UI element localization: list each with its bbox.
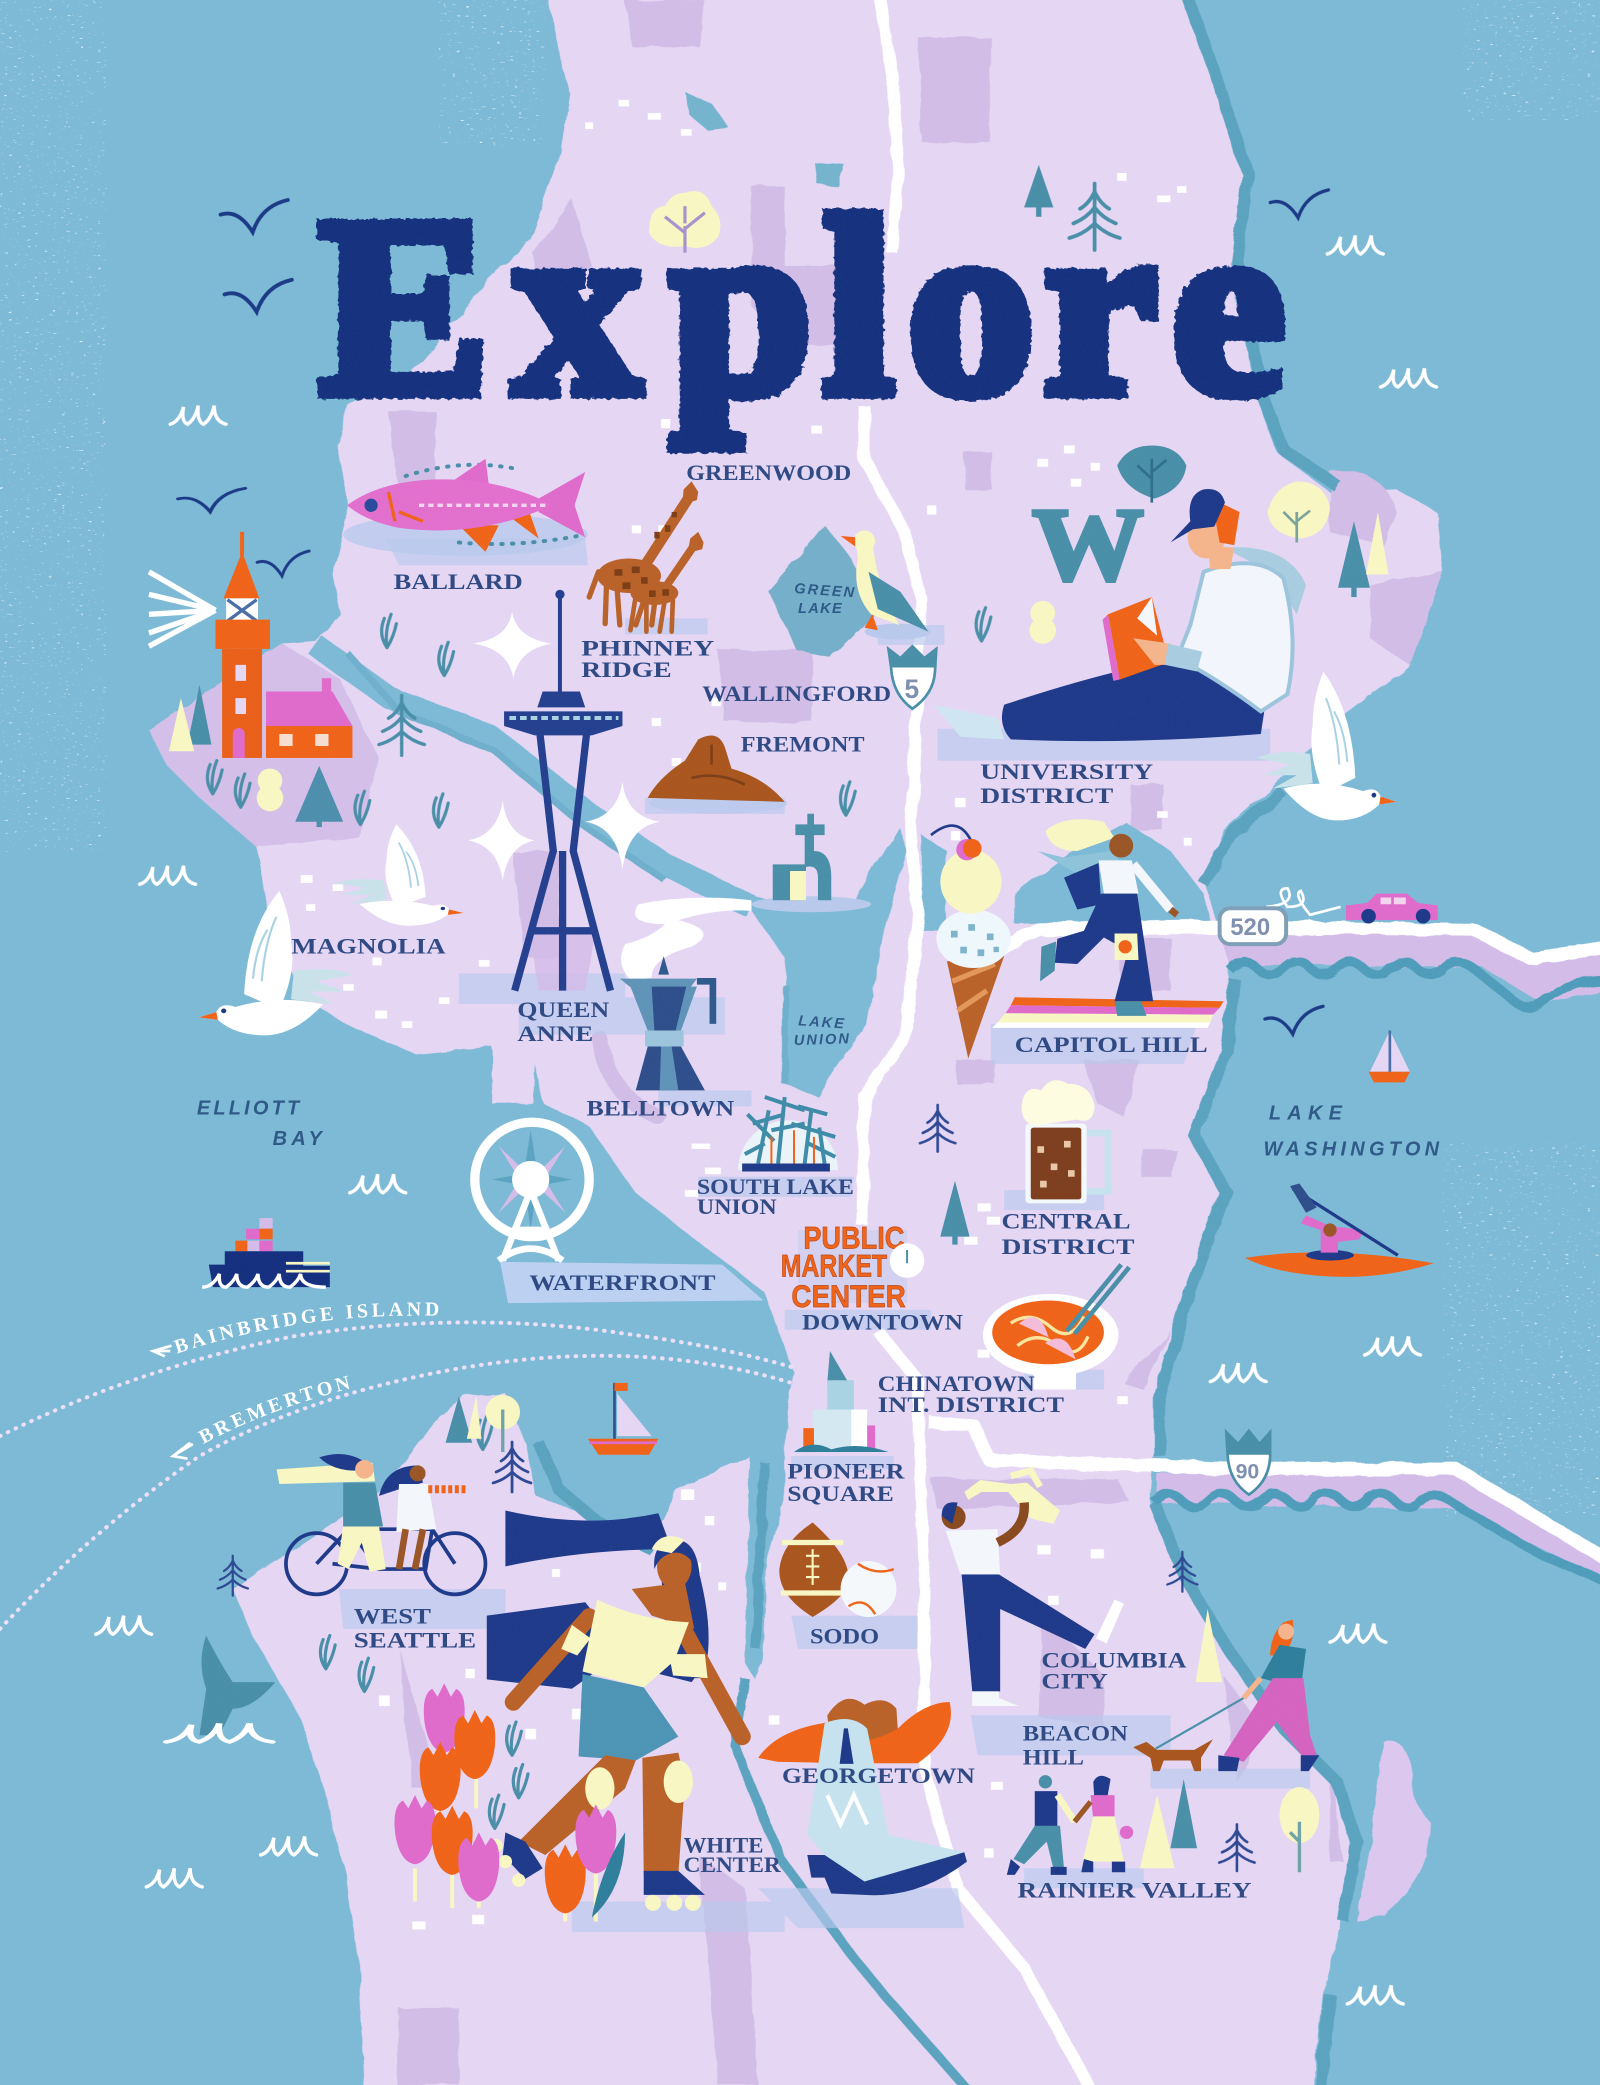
icon: ferry [202, 1218, 330, 1287]
icon: Public Market Center sign [781, 1220, 924, 1314]
icon: sailboats [588, 1031, 1410, 1455]
neighbourhood labels: WHITE [684, 1832, 763, 1857]
icon: roller skater [487, 1511, 742, 1911]
icon: couple walking [1007, 1775, 1133, 1875]
icon: Space Needle [504, 590, 622, 991]
water waves [96, 235, 1436, 2004]
neighbourhood labels: INT. DISTRICT [878, 1392, 1064, 1417]
neighbourhood labels: BALLARD [394, 569, 523, 594]
neighbourhood labels: SQUARE [787, 1481, 894, 1506]
520 highway [991, 927, 1600, 959]
water labels: LAKE [798, 1013, 846, 1033]
birds [178, 190, 1328, 1034]
water labels: GREEN [794, 581, 857, 601]
water labels: LAKE [798, 601, 843, 617]
neighbourhood labels: SOUTH LAKE [697, 1174, 854, 1199]
ship canal [315, 645, 751, 907]
520 wavy shoreline [1230, 961, 1600, 1007]
neighbourhood labels: BEACON [1023, 1721, 1129, 1746]
neighbourhood labels: GREENWOOD [686, 460, 851, 485]
Belltown purple curve [599, 1037, 658, 1117]
neighbourhood labels: COLUMBIA [1041, 1647, 1187, 1672]
icon: clock tower and house [149, 532, 352, 758]
icon: large gull over Elliott Bay [199, 891, 352, 1035]
sign: I-90 shield: 90 [1236, 1460, 1259, 1484]
neighbourhood labels: MAGNOLIA [291, 933, 446, 958]
icon: saxophone player [942, 1471, 1124, 1706]
icon: whale tail [166, 1636, 275, 1742]
neighbourhood labels: GEORGETOWN [782, 1763, 976, 1788]
I-90 wavy shoreline [1154, 1493, 1600, 1582]
Lake Union [739, 827, 907, 1097]
neighbourhood labels: ANNE [517, 1021, 593, 1046]
icon: dog walker [1133, 1620, 1319, 1771]
blue label shadow strips [339, 539, 1310, 1932]
icon: beer mug [1021, 1080, 1108, 1203]
neighbourhood labels: DISTRICT [980, 783, 1113, 808]
canal soft edge [348, 654, 785, 1084]
icon: ice cream cone [931, 826, 1011, 1058]
neighbourhood labels: RAINIER VALLEY [1017, 1878, 1252, 1903]
neighbourhood labels: FREMONT [741, 731, 865, 756]
icon: football and baseball [779, 1523, 896, 1617]
icon: coffee steam [621, 898, 751, 981]
neighbourhood labels: HILL [1023, 1745, 1084, 1770]
sign: I-5 shield: 5 [904, 674, 919, 704]
neighbourhood labels: WEST [354, 1604, 431, 1629]
ambient icons on land and water [96, 165, 1436, 2004]
neighbourhood labels: WALLINGFORD [702, 681, 891, 706]
neighbourhood labels: WATERFRONT [529, 1270, 716, 1295]
I-5 highway [862, 0, 1097, 2085]
icon: Chinatown towers [794, 1351, 888, 1452]
sign: 520 [1220, 908, 1286, 944]
icon: student reading: W [1032, 489, 1144, 603]
east and west shoreline strokes [539, 0, 1357, 2085]
Ballard purple district [149, 644, 379, 847]
icon: tulips [394, 1683, 625, 1921]
icon: biodome [738, 1097, 838, 1171]
Mercer Island [1357, 1741, 1430, 1921]
neighbourhood labels: DOWNTOWN [802, 1310, 964, 1335]
panel: Waterfront strip [500, 1262, 763, 1303]
neighbourhood labels: RIDGE [581, 657, 672, 682]
sign: I-90 shield [1226, 1431, 1270, 1495]
neighbourhood labels: QUEEN [517, 997, 610, 1022]
stars [468, 612, 660, 880]
route labels [149, 1302, 438, 1460]
neighbourhood labels: CAPITOL HILL [1015, 1032, 1208, 1057]
purple district blocks [388, 0, 1443, 2085]
sign: I-5 shield [888, 646, 936, 709]
white street dashes [301, 100, 1192, 1929]
bridge deck I-90 [1157, 1469, 1600, 1582]
icon: giraffes [589, 481, 704, 632]
neighbourhood labels: DISTRICT [1001, 1234, 1134, 1259]
icon: 520 car [1266, 888, 1438, 923]
icon: cowboy hat and boot [758, 1699, 967, 1895]
water labels: ELLIOTT [197, 1097, 303, 1119]
neighbourhood labels: PHINNEY [581, 636, 714, 661]
icon: Ballard salmon [343, 459, 588, 556]
water labels: WASHINGTON [1264, 1139, 1443, 1161]
water labels: BAY [273, 1128, 326, 1150]
Portage Bay [922, 835, 947, 931]
icon: Public Market Center sign: PUBLIC [803, 1220, 904, 1256]
icon: ferris wheel [475, 1122, 589, 1261]
icon: tandem bike riders [277, 1454, 485, 1594]
Union Bay [1015, 823, 1210, 924]
neighbourhood labels: UNIVERSITY [980, 759, 1153, 784]
icon: pho bowl [983, 1265, 1129, 1390]
neighbourhood labels [291, 460, 1252, 1903]
water labels [197, 581, 1443, 1161]
icon: Public Market Center sign: CENTER [791, 1278, 906, 1314]
sign: 520: 520 [1230, 914, 1270, 941]
route labels: BAINBRIDGE ISLAND [173, 1302, 438, 1354]
neighbourhood labels: SODO [810, 1624, 879, 1649]
bridge deck 520 [1217, 931, 1600, 1004]
title: Explore: Explore [319, 165, 1285, 448]
icon: moka pot [620, 956, 713, 1090]
neighbourhood labels: SEATTLE [354, 1628, 476, 1653]
icon: Public Market Center sign: MARKET [781, 1248, 888, 1284]
neighbourhood labels: CITY [1041, 1669, 1108, 1694]
seaweed tufts [207, 608, 991, 1828]
I-90 highway [928, 1421, 1600, 1561]
icon: striped carpet [992, 997, 1224, 1028]
small pond top [686, 93, 845, 186]
icon: gull over U District [1257, 672, 1397, 820]
neighbourhood labels: PIONEER [787, 1459, 905, 1484]
icon: Fremont troll [648, 735, 787, 814]
route labels: BREMERTON [198, 1376, 350, 1444]
neighbourhood labels: BELLTOWN [587, 1096, 735, 1121]
icon: kayaker [1245, 1183, 1434, 1277]
icon: student reading [934, 489, 1306, 741]
water speckle textures [0, 0, 1600, 1516]
icon: Seattle Center sculpture [751, 814, 871, 912]
water labels: UNION [794, 1031, 851, 1049]
neighbourhood labels: CENTRAL [1001, 1209, 1131, 1234]
icon: gull over Magnolia [335, 824, 464, 926]
neighbourhood labels: UNION [697, 1194, 777, 1219]
trees [169, 165, 1389, 1872]
icon: duck at Green Lake [841, 531, 931, 640]
Duwamish channel and river [734, 1463, 978, 2085]
neighbourhood labels: CHINATOWN [878, 1371, 1035, 1396]
water labels: LAKE [1269, 1103, 1346, 1125]
neighbourhood labels: CENTER [684, 1852, 781, 1877]
icon: Capitol Hill runner [1037, 819, 1177, 1016]
Green Lake [769, 525, 878, 658]
icon: ferry route dotted lines [0, 1322, 791, 1629]
